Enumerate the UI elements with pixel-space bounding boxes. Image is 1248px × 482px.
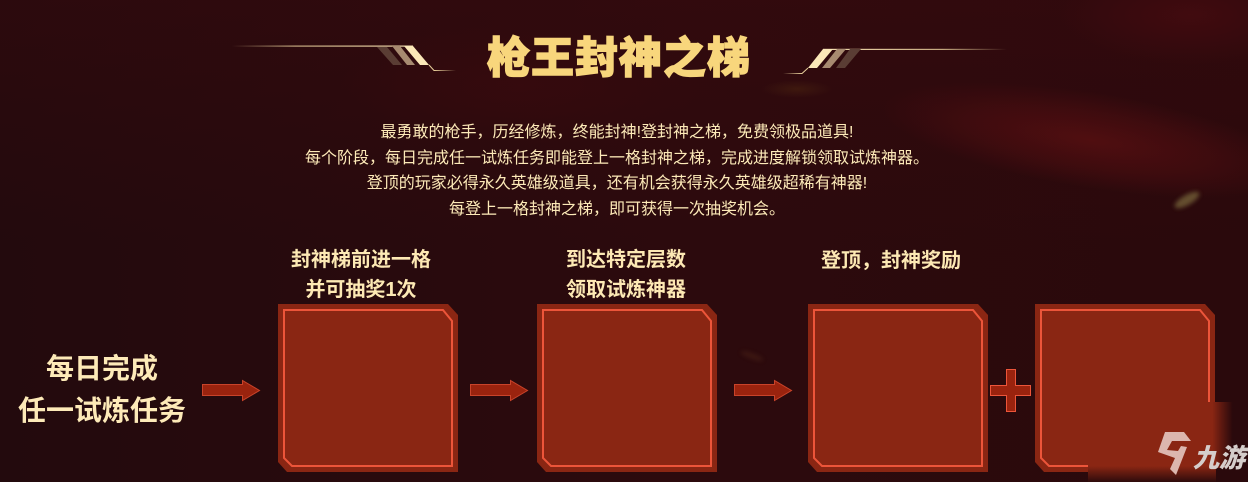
step 2 heading: 到达特定层数 [566,249,686,271]
reward box 3 [808,304,988,472]
title: 枪王封神之梯 [487,35,751,83]
arrow: step 2 to step 3 [734,380,792,400]
step 1 heading [291,248,431,301]
reward box 4 [1035,304,1215,472]
left label: daily task: 每日完成 [46,353,158,384]
intro text [305,118,929,219]
left label: daily task [18,353,186,426]
left label: daily task: 任一试炼任务 [18,395,186,426]
step 2 heading [566,248,686,301]
intro text: 登顶的玩家必得永久英雄级道具，还有机会获得永久英雄级超稀有神器! [367,169,867,193]
title ornament: right [783,49,1007,74]
intro text: 每登上一格封神之梯，即可获得一次抽奖机会。 [449,195,785,219]
arrow: step 1 to step 2 [470,380,528,400]
title ornament: left [232,46,456,70]
plus sign [990,370,1030,412]
reward box 2 [537,304,717,472]
step 3 heading: 登顶，封神奖励 [821,244,961,273]
watermark: 九游 logo [1088,402,1248,482]
step 1 heading: 封神梯前进一格 [291,249,431,271]
watermark: 九游 logo: 九游 [1193,443,1245,473]
arrow: task to step 1 [202,380,260,400]
reward box 1 [278,304,458,472]
step 1 heading: 并可抽奖1次 [305,279,417,301]
step 2 heading: 领取试炼神器 [566,279,686,301]
intro text: 每个阶段，每日完成任一试炼任务即能登上一格封神之梯，完成进度解锁领取试炼神器。 [305,144,929,168]
intro text: 最勇敢的枪手，历经修炼，终能封神!登封神之梯，免费领极品道具! [380,118,853,142]
